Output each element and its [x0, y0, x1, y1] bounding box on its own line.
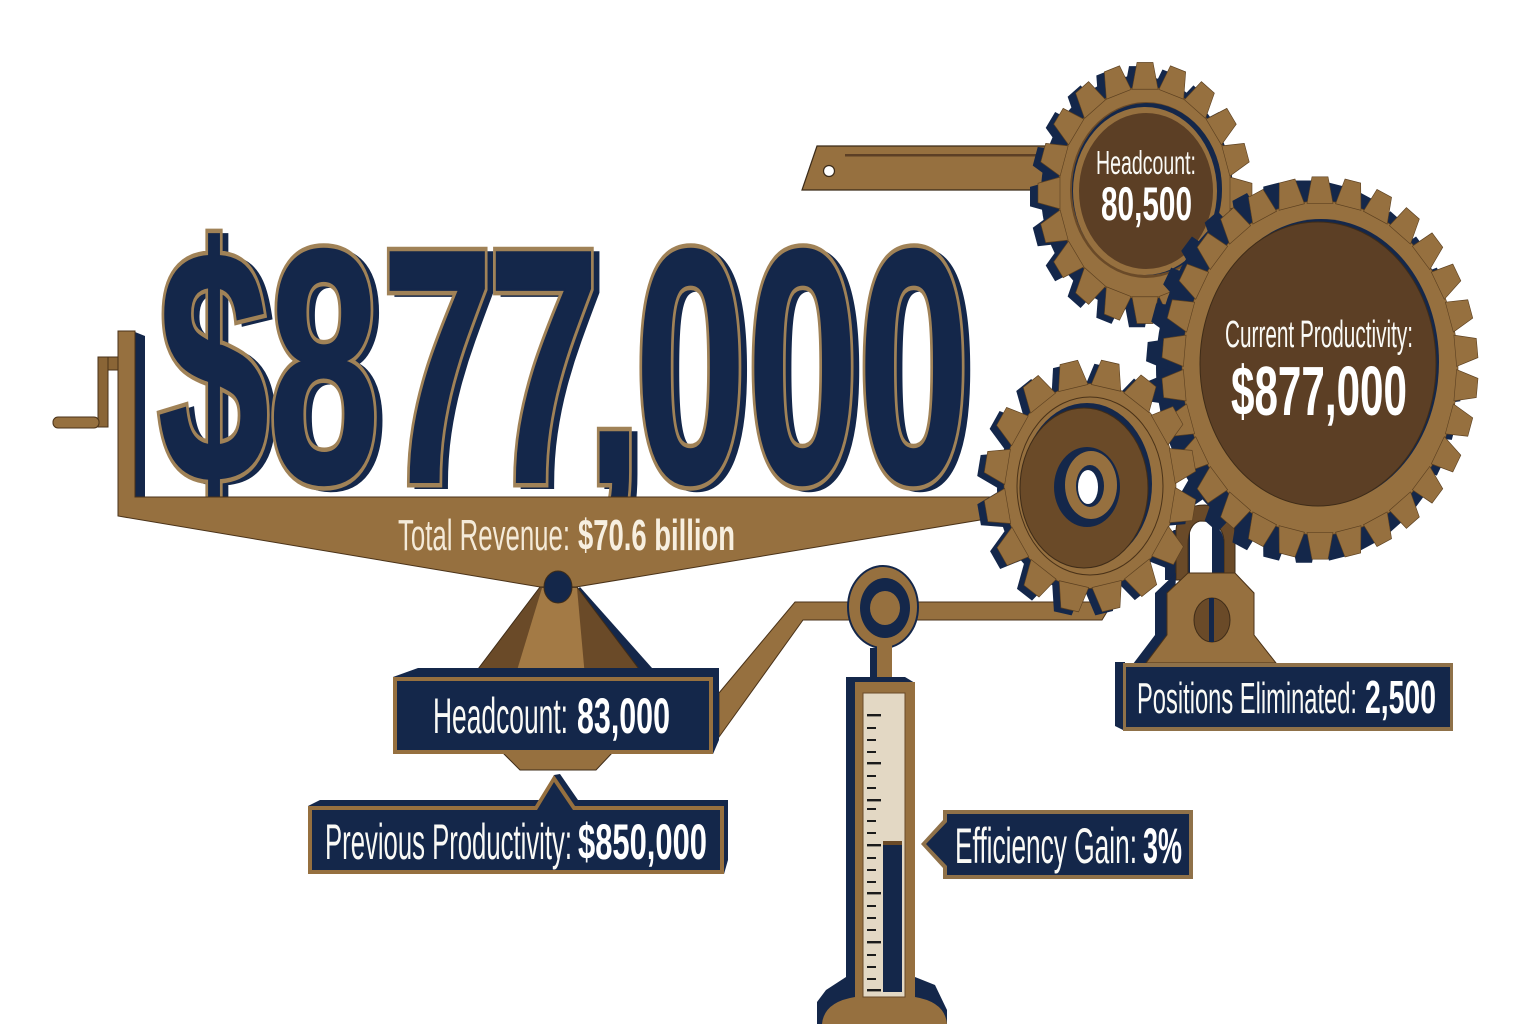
top lever arm	[802, 146, 1045, 190]
big headline number: $877,000	[158, 181, 969, 554]
beam body	[118, 331, 1000, 590]
big headline number: $877,000	[164, 184, 976, 557]
thermometer gauge	[817, 566, 947, 1024]
gear: top headcount 80,500: 80,500	[1101, 177, 1192, 230]
lock bracket and positions eliminated	[1115, 505, 1453, 731]
pedestal	[472, 587, 652, 770]
beam label: total revenue: Total Revenue:	[398, 511, 570, 560]
gear: big current productivity	[1146, 177, 1478, 563]
scale beam with upright and crank	[53, 331, 1000, 590]
big headline number: $877,000	[158, 181, 969, 554]
navy upright shadow	[135, 332, 145, 497]
label box: headcount 83,000: 83,000	[577, 688, 670, 744]
gauge column	[817, 645, 947, 1024]
label box: headcount 83,000: Headcount:	[433, 688, 568, 744]
icon: padlock	[1133, 505, 1276, 664]
icon: hand crank	[53, 357, 118, 428]
gear: top headcount 80,500	[1030, 62, 1252, 327]
label box: previous productivity: Previous Productivity:	[325, 814, 572, 870]
linkage rod between headcount box and gears	[719, 602, 1113, 737]
pivot circle	[544, 571, 572, 603]
callout: efficiency gain: Efficiency Gain:	[955, 818, 1137, 874]
beam label: total revenue: $70.6 billion	[578, 511, 735, 560]
pivot ring	[848, 566, 918, 648]
gauge tick marks	[867, 714, 881, 991]
callout: efficiency gain	[921, 810, 1193, 879]
label box: positions eliminated: Positions Eliminated:	[1137, 674, 1357, 723]
callout: efficiency gain: 3%	[1143, 818, 1182, 874]
gear: top headcount 80,500: Headcount:	[1096, 144, 1196, 181]
gear: lower drive gear	[976, 359, 1197, 617]
label box: headcount 83,000	[393, 668, 719, 754]
label box: previous productivity	[308, 774, 728, 874]
label box: positions eliminated: 2,500	[1365, 671, 1436, 723]
label box: positions eliminated	[1115, 662, 1453, 731]
label box: previous productivity: $850,000	[578, 814, 707, 870]
gear: big current productivity: $877,000	[1231, 352, 1407, 430]
